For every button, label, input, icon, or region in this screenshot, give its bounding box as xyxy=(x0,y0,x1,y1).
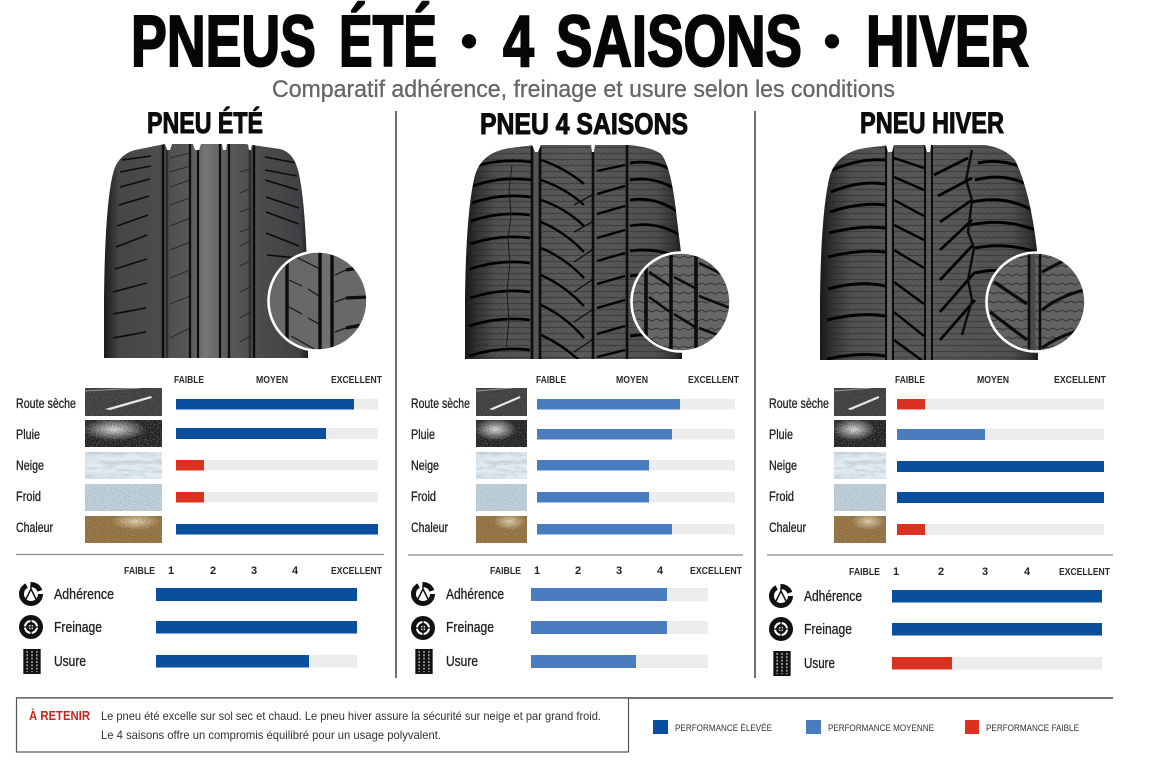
row: froid: Froid xyxy=(769,489,794,504)
axis labels: conditions xyxy=(895,375,1106,386)
title: HIVER xyxy=(866,2,1029,82)
row: pluie xyxy=(769,420,1104,447)
row: froid xyxy=(411,484,735,511)
panel: pneu 4 saisons xyxy=(408,108,743,674)
metric: adhérence: Adhérence xyxy=(446,587,504,603)
row: neige xyxy=(411,452,735,479)
legend: élevée: PERFORMANCE ÉLEVÉE xyxy=(675,723,772,734)
axis labels: scores: EXCELLENT xyxy=(1059,567,1110,578)
row: chaleur xyxy=(411,516,735,543)
metric: usure xyxy=(415,649,708,674)
callout: à retenir: Le 4 saisons offre un compromis équilibré pour un usage polyvalent. xyxy=(101,728,441,742)
metric: usure: Usure xyxy=(804,656,835,672)
axis labels: scores: EXCELLENT xyxy=(690,566,742,577)
row: froid xyxy=(16,484,378,511)
axis labels: scores: EXCELLENT xyxy=(331,566,382,577)
metric: usure: Usure xyxy=(446,654,478,670)
row: pluie: Pluie xyxy=(411,427,435,442)
metric: adhérence xyxy=(772,586,1102,606)
axis labels: scores: FAIBLE xyxy=(490,566,521,577)
row: route sèche: Route sèche xyxy=(769,396,829,411)
row: froid: Froid xyxy=(16,489,41,504)
row: route sèche: Route sèche xyxy=(411,396,470,411)
metric: adhérence xyxy=(414,584,708,604)
inset: 4 saisons detail xyxy=(632,252,732,353)
title: • xyxy=(823,13,841,69)
title: SAISONS xyxy=(556,2,802,82)
callout: à retenir xyxy=(16,698,628,752)
row: froid: Froid xyxy=(411,489,436,504)
axis labels: conditions: MOYEN xyxy=(977,375,1009,386)
metric: freinage xyxy=(769,617,1102,641)
title: PNEUS xyxy=(131,2,316,82)
axis labels: scores: FAIBLE xyxy=(849,567,880,578)
panel: pneu été xyxy=(16,106,384,674)
heading: pneu 4 saisons: PNEU 4 SAISONS xyxy=(480,108,688,141)
tire: hiver tread xyxy=(820,145,1087,362)
title: 4 xyxy=(503,2,534,82)
row: route sèche xyxy=(411,388,735,416)
heading: pneu été: PNEU ÉTÉ xyxy=(147,106,263,140)
axis labels: scores: 4 xyxy=(292,565,299,577)
row: chaleur xyxy=(769,516,1104,543)
metric: freinage xyxy=(411,616,708,640)
axis labels: conditions: MOYEN xyxy=(616,375,648,386)
row: neige xyxy=(16,452,378,479)
row: chaleur: Chaleur xyxy=(411,520,448,535)
title: • xyxy=(460,13,478,69)
axis labels: scores: 1 xyxy=(534,565,540,577)
metric: adhérence: Adhérence xyxy=(804,589,862,605)
row: neige: Neige xyxy=(411,458,439,473)
metric: freinage: Freinage xyxy=(446,620,494,636)
axis labels: conditions: FAIBLE xyxy=(536,375,566,386)
legend: faible xyxy=(965,720,1079,734)
row: neige: Neige xyxy=(16,458,44,473)
row: chaleur: Chaleur xyxy=(16,520,53,535)
row: route sèche xyxy=(16,388,378,416)
metric: usure xyxy=(23,649,357,674)
inset: hiver detail xyxy=(986,252,1087,353)
metric: adhérence: Adhérence xyxy=(54,587,114,603)
title: ÉTÉ xyxy=(339,2,437,82)
metric: freinage xyxy=(19,615,357,639)
legend: élevée xyxy=(653,720,772,734)
callout: à retenir: Le pneu été excelle sur sol sec et chaud. Le pneu hiver assure la sécurité sur neige et par grand froid. xyxy=(101,709,601,723)
row: neige: Neige xyxy=(769,458,797,473)
tire: 4 saisons tread xyxy=(465,145,732,365)
axis labels: scores: 3 xyxy=(251,565,257,577)
axis labels: scores xyxy=(490,565,742,577)
row: pluie xyxy=(16,420,378,447)
row: route sèche: Route sèche xyxy=(16,396,76,411)
metric: usure: Usure xyxy=(54,654,86,670)
callout: à retenir: À RETENIR xyxy=(29,708,91,723)
axis labels: scores: FAIBLE xyxy=(124,566,155,577)
heading: pneu hiver: PNEU HIVER xyxy=(860,107,1004,140)
row: chaleur: Chaleur xyxy=(769,520,806,535)
row: froid xyxy=(769,484,1104,511)
title xyxy=(131,2,1029,82)
axis labels: conditions: EXCELLENT xyxy=(688,375,739,386)
axis labels: scores xyxy=(124,565,382,577)
metric: adhérence xyxy=(22,584,357,604)
axis labels: scores: 4 xyxy=(1024,566,1031,578)
axis labels: scores: 3 xyxy=(982,566,988,578)
axis labels: scores: 3 xyxy=(616,565,622,577)
row: chaleur xyxy=(16,516,378,543)
row: pluie xyxy=(411,420,735,447)
axis labels: conditions: MOYEN xyxy=(256,375,288,386)
row: neige xyxy=(769,452,1104,479)
axis labels: scores: 2 xyxy=(938,566,944,578)
axis labels: scores: 4 xyxy=(657,565,664,577)
legend: faible: PERFORMANCE FAIBLE xyxy=(986,723,1079,734)
axis labels: scores: 1 xyxy=(893,566,899,578)
row: pluie: Pluie xyxy=(769,427,793,442)
axis labels: scores: 2 xyxy=(210,565,216,577)
axis labels: conditions xyxy=(536,375,739,386)
inset: été detail xyxy=(268,251,368,351)
metric: freinage: Freinage xyxy=(54,620,102,636)
axis labels: conditions: EXCELLENT xyxy=(331,375,382,386)
legend: moyenne: PERFORMANCE MOYENNE xyxy=(828,723,934,734)
axis labels: conditions: EXCELLENT xyxy=(1054,375,1106,386)
axis labels: conditions: FAIBLE xyxy=(895,375,925,386)
panel: pneu hiver xyxy=(767,107,1113,676)
metric: freinage: Freinage xyxy=(804,622,852,638)
row: route sèche xyxy=(769,388,1104,416)
axis labels: scores: 1 xyxy=(168,565,174,577)
metric: usure xyxy=(773,651,1102,676)
axis labels: conditions xyxy=(174,375,382,386)
axis labels: scores xyxy=(849,566,1110,578)
axis labels: scores: 2 xyxy=(575,565,581,577)
tire: été tread xyxy=(104,144,368,358)
row: pluie: Pluie xyxy=(16,427,40,442)
legend xyxy=(653,720,1079,734)
axis labels: conditions: FAIBLE xyxy=(174,375,204,386)
subtitle: Comparatif adhérence, freinage et usure selon les conditions xyxy=(272,76,895,103)
legend: moyenne xyxy=(806,720,934,734)
